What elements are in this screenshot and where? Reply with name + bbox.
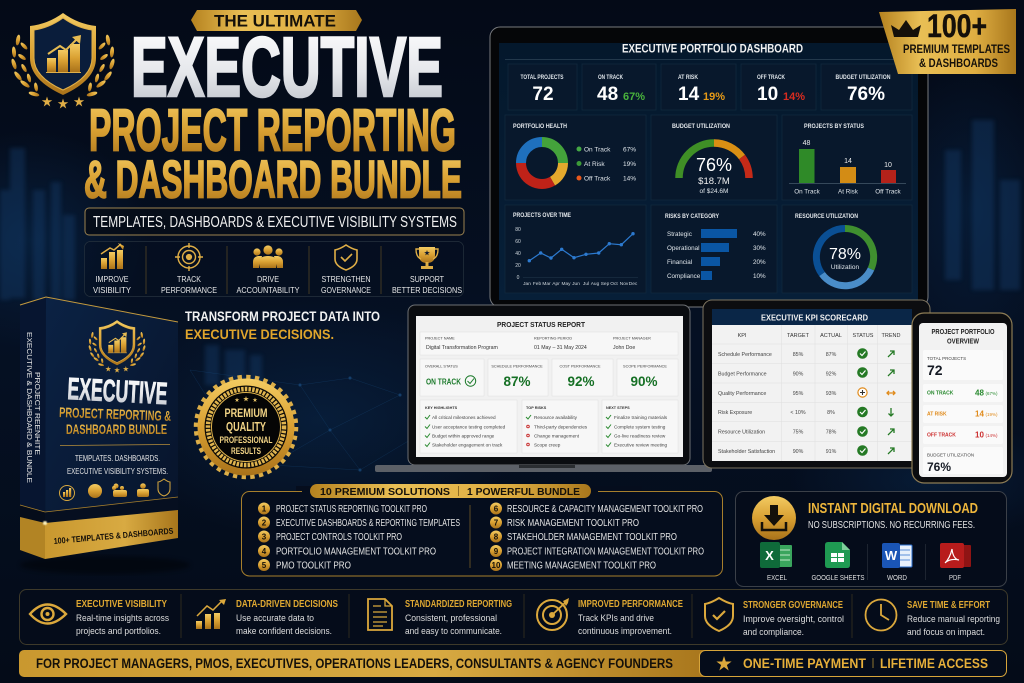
legend: On Track	[584, 146, 611, 154]
pill heading: 1 POWERFUL BUNDLE	[467, 486, 580, 498]
bar chart: 10	[884, 162, 892, 169]
highlights, risks and next steps: Resource availability	[534, 415, 578, 420]
line chart: 20	[515, 263, 521, 269]
spine text: PROJECT REENHITE	[33, 372, 40, 455]
highlights, risks and next steps	[420, 400, 678, 453]
on track: 48	[975, 388, 984, 398]
project info row: REPORTING PERIOD	[534, 336, 572, 340]
table rows: Stakeholder Satisfaction	[718, 449, 775, 455]
benefit: improved performance: Track KPIs and drive	[578, 613, 654, 623]
on track: ON TRACK	[927, 390, 954, 396]
panel: instant digital download: INSTANT DIGITAL DOWNLOAD	[808, 500, 978, 517]
label: improve visibility: VISIBILITY	[93, 285, 131, 295]
status cards: ON TRACK	[426, 378, 461, 386]
icon: pdf	[940, 543, 971, 568]
highlights, risks and next steps: Third-party dependencies	[534, 424, 588, 430]
monitor: executive portfolio dashboard	[490, 27, 928, 307]
off track	[927, 430, 998, 440]
at risk: AT RISK	[927, 412, 947, 418]
file type labels: EXCEL	[767, 573, 787, 582]
badge numbers: 6	[494, 504, 499, 514]
at risk: 14	[975, 410, 984, 418]
panel: instant digital download	[736, 492, 1006, 586]
line chart: Jun	[572, 281, 580, 287]
label: drive accountability: DRIVE	[257, 274, 279, 284]
budget utilization: BUDGET UTILIZATION	[927, 452, 974, 458]
table rows: 90%	[793, 449, 804, 455]
label: drive accountability: ACCOUNTABILITY	[236, 285, 300, 295]
off track: (14%)	[986, 433, 998, 438]
panel: projects over time	[505, 205, 646, 293]
benefit: standardized reporting: and easy to communicate.	[405, 626, 502, 636]
status cards: SCHEDULE PERFORMANCE	[491, 364, 543, 368]
project info row: John Doe	[613, 345, 635, 351]
panel: instant digital download: NO SUBSCRIPTIONS. NO RECURRING FEES.	[808, 520, 975, 531]
badge numbers	[262, 504, 501, 570]
legend: Off Track	[584, 176, 611, 182]
emblem: shield with laurel	[10, 13, 116, 108]
box title: EXECUTIVE	[67, 371, 168, 411]
KPI: total projects: 72	[532, 84, 554, 105]
icon: word	[882, 543, 912, 568]
benefit: save time and effort: Reduce manual reporting	[907, 614, 1000, 624]
status cards	[420, 359, 678, 396]
line chart: Jan	[523, 281, 531, 287]
horizontal bars: Strategic	[667, 231, 692, 238]
budget utilization: 76%	[927, 460, 951, 474]
panel: resource utilization: 78%	[829, 246, 861, 263]
on track	[927, 388, 998, 398]
icon: support better decisions	[416, 247, 438, 269]
line chart: 60	[515, 239, 521, 245]
line chart: Aug	[591, 281, 600, 287]
horizontal bars	[667, 229, 766, 280]
KPI: budget utilization: BUDGET UTILIZATION	[836, 75, 890, 81]
KPI: off track	[741, 64, 816, 110]
panel: risks by category: RISKS BY CATEGORY	[665, 213, 720, 220]
KPI: at risk: 14	[678, 84, 700, 105]
line chart: Apr	[552, 281, 560, 287]
line chart: 40	[515, 251, 521, 257]
solution list: RESOURCE & CAPACITY MANAGEMENT TOOLKIT PRO	[507, 504, 703, 515]
payment callout: ONE-TIME PAYMENT	[743, 656, 867, 671]
report title: PROJECT STATUS REPORT	[497, 320, 585, 329]
KPI: on track: 67%	[623, 91, 645, 103]
label: support better decisions: SUPPORT	[410, 274, 444, 284]
panel: resource utilization	[782, 205, 912, 293]
audience band	[19, 650, 709, 677]
legend: At Risk	[584, 161, 605, 168]
panel: budget utilization gauge	[651, 115, 777, 200]
phone title: PROJECT PORTFOLIO	[932, 329, 995, 336]
badge numbers: 2	[262, 518, 267, 528]
benefit: data-driven decisions	[196, 599, 338, 636]
seal text: PREMIUM	[224, 406, 268, 420]
badge numbers: 7	[494, 518, 499, 528]
table rows: 78%	[826, 430, 837, 436]
box gold band: 100+ TEMPLATES & DASHBOARDS	[53, 526, 174, 546]
badge: 100+ premium templates	[879, 8, 1016, 74]
KPI: total projects	[508, 64, 577, 110]
table rows: Budget Performance	[718, 372, 767, 378]
bar chart	[789, 140, 906, 196]
line chart: 80	[515, 227, 521, 233]
badge numbers: 9	[494, 547, 499, 556]
off track: OFF TRACK	[927, 432, 956, 438]
benefit: executive visibility: projects and portfolios.	[76, 626, 161, 636]
solution list: EXECUTIVE DASHBOARDS & REPORTING TEMPLATES	[276, 518, 460, 529]
bar chart: 48	[803, 140, 810, 147]
line chart: Jul	[583, 281, 589, 287]
badge numbers: 8	[494, 532, 499, 542]
panel: budget utilization gauge: 76%	[696, 155, 732, 175]
seal: premium quality	[196, 377, 296, 477]
icon: word: W	[885, 548, 898, 563]
status cards: COST PERFORMANCE	[559, 364, 601, 368]
payment callout	[700, 650, 1006, 676]
solution list: STAKEHOLDER MANAGEMENT TOOLKIT PRO	[507, 532, 677, 543]
highlights, risks and next steps: Stakeholder engagement on track	[432, 442, 503, 448]
table headers: KPI	[738, 333, 747, 339]
cards	[923, 350, 1003, 474]
label: support better decisions: BETTER DECISIONS	[392, 285, 462, 295]
number badges	[258, 502, 502, 571]
badge: 100+ premium templates: & DASHBOARDS	[919, 58, 998, 70]
panel: risks by category	[651, 205, 777, 293]
icon: track performance	[175, 243, 203, 271]
legend: 67%	[623, 146, 636, 154]
table headers: STATUS	[853, 333, 874, 339]
horizontal bars: Operational	[667, 245, 700, 252]
utilization ring	[816, 228, 874, 286]
KPI: on track: ON TRACK	[598, 75, 624, 81]
highlights, risks and next steps: Finalize training materials	[614, 415, 668, 420]
table rows	[718, 352, 837, 455]
benefit: save time and effort: SAVE TIME & EFFORT	[907, 600, 990, 611]
status cards: SCOPE PERFORMANCE	[623, 364, 667, 368]
KPI: at risk: 19%	[703, 91, 725, 103]
file type labels: WORD	[887, 573, 907, 582]
KPI: on track	[582, 64, 656, 110]
benefit: save time and effort: and focus on impact.	[907, 627, 985, 637]
badge: the ultimate	[191, 10, 362, 31]
line chart: Oct	[610, 281, 618, 287]
subtitle box	[85, 208, 464, 235]
box front	[45, 297, 178, 559]
box gold band	[20, 510, 178, 559]
budget utilization	[927, 452, 974, 474]
table rows: 95%	[793, 391, 804, 397]
bar chart: On Track	[794, 188, 821, 196]
solution list: PMO TOOLKIT PRO	[276, 560, 351, 572]
benefit: save time and effort	[866, 600, 1000, 637]
benefit: stronger governance: STRONGER GOVERNANCE	[743, 600, 843, 611]
trend arrows	[887, 351, 895, 454]
benefit: standardized reporting	[368, 599, 512, 636]
benefit: improved performance	[537, 598, 683, 636]
label: improve visibility: IMPROVE	[96, 274, 129, 284]
gauge arcs	[679, 143, 749, 178]
icon row: five benefits	[84, 242, 464, 296]
total projects: 72	[927, 362, 943, 378]
title: dashboard bundle: & DASHBOARD BUNDLE	[84, 150, 462, 210]
project info row	[420, 332, 678, 355]
panel: projects over time: PROJECTS OVER TIME	[513, 212, 572, 219]
label: strengthen governance: STRENGTHEN	[322, 274, 370, 284]
KPI: budget utilization: 76%	[847, 84, 885, 105]
status cards: 87%	[503, 374, 531, 389]
label: track performance: TRACK	[177, 274, 201, 284]
status icons	[857, 348, 868, 456]
panel: resource utilization: RESOURCE UTILIZATION	[795, 213, 858, 220]
solution list: PORTFOLIO MANAGEMENT TOOLKIT PRO	[276, 546, 436, 558]
highlights, risks and next steps: Executive review meeting	[614, 442, 668, 448]
benefit: standardized reporting: STANDARDIZED REPORTING	[405, 599, 512, 610]
KPI: off track: 10	[757, 84, 778, 105]
panel: budget utilization gauge: of $24.6M	[700, 188, 728, 195]
panel: budget utilization gauge: $18.7M	[698, 176, 730, 187]
line chart: May	[561, 281, 571, 287]
benefit: stronger governance: and compliance.	[743, 627, 804, 637]
seal text	[220, 406, 273, 457]
panel: ten premium solutions	[242, 484, 722, 576]
bar chart: Off Track	[875, 188, 902, 196]
file type labels: GOOGLE SHEETS	[812, 573, 864, 582]
icon: google sheets	[825, 542, 850, 568]
spine text	[25, 332, 40, 483]
KPI: at risk: AT RISK	[678, 75, 699, 81]
horizontal bars: 10%	[753, 273, 766, 280]
box tagline: TEMPLATES. DASHBOARDS.	[75, 454, 160, 463]
table rows: 85%	[793, 352, 804, 358]
project info row: PROJECT NAME	[425, 336, 455, 340]
table rows: Quality Performance	[718, 391, 766, 397]
KPI: off track: 14%	[783, 91, 805, 103]
line chart: 0	[517, 275, 520, 281]
line chart	[515, 227, 638, 287]
panel: resource utilization: Utilization	[831, 264, 859, 271]
phone title: OVERVIEW	[947, 338, 979, 346]
benefit: data-driven decisions: DATA-DRIVEN DECISIONS	[236, 599, 338, 610]
pill heading: 10 PREMIUM SOLUTIONS	[320, 486, 450, 498]
solution list: RISK MANAGEMENT TOOLKIT PRO	[507, 518, 639, 529]
highlights, risks and next steps: Change management	[534, 434, 580, 438]
benefit: stronger governance: Improve oversight, control	[743, 614, 844, 624]
table rows: 93%	[826, 391, 837, 397]
solution list: MEETING MANAGEMENT TOOLKIT PRO	[507, 560, 656, 572]
project info row: 01 May – 31 May 2024	[534, 345, 587, 351]
solution list: PROJECT CONTROLS TOOLKIT PRO	[276, 532, 402, 543]
payment callout: LIFETIME ACCESS	[880, 656, 988, 671]
bar chart: At Risk	[838, 188, 859, 196]
badge numbers: 10	[492, 561, 501, 570]
icon: excel	[760, 542, 792, 568]
box subtitle: PROJECT REPORTING &	[59, 404, 171, 424]
audience band: FOR PROJECT MANAGERS, PMOS, EXECUTIVES, OPERATIONS LEADERS, CONSULTANTS & AGENCY FOUNDERS	[36, 656, 673, 671]
label: track performance: PERFORMANCE	[161, 285, 217, 295]
benefit: data-driven decisions: Use accurate data to	[236, 613, 314, 623]
benefit: improved performance: IMPROVED PERFORMANCE	[578, 599, 683, 610]
benefit: stronger governance	[705, 598, 844, 637]
seal stars	[235, 396, 257, 402]
badge numbers: 3	[262, 532, 267, 542]
KPI: off track: OFF TRACK	[757, 75, 786, 81]
badge: the ultimate: THE ULTIMATE	[214, 12, 336, 30]
highlights, risks and next steps: Budget within approved range	[432, 434, 495, 438]
box tagline: EXECUTIVE VISIBILITY SYSTEMS.	[67, 467, 168, 476]
seal text: QUALITY	[226, 419, 266, 434]
horizontal bars: 20%	[753, 259, 766, 266]
box highlight	[43, 521, 47, 525]
horizontal bars: 30%	[753, 245, 766, 252]
icon: drive accountability	[253, 245, 283, 268]
box icons	[60, 479, 170, 500]
label: strengthen governance: GOVERNANCE	[321, 285, 371, 295]
title: project reporting: PROJECT REPORTING	[89, 98, 456, 164]
highlights, risks and next steps: Go-live readiness review	[614, 434, 666, 438]
bar chart: 14	[844, 158, 852, 165]
table rows: 90%	[793, 372, 804, 378]
tablet: executive KPI scorecard	[703, 300, 930, 468]
table rows: Resource Utilization	[718, 430, 765, 436]
KPI: total projects: TOTAL PROJECTS	[520, 75, 564, 81]
seal text: RESULTS	[231, 446, 261, 457]
tagline	[185, 309, 380, 342]
solution list: PROJECT INTEGRATION MANAGEMENT TOOLKIT PRO	[507, 546, 704, 558]
highlights, risks and next steps: User acceptance testing completed	[432, 424, 506, 430]
solution list	[276, 504, 704, 572]
line chart: Dec	[629, 281, 638, 287]
tagline: TRANSFORM PROJECT DATA INTO	[185, 309, 380, 324]
table rows: Schedule Performance	[718, 352, 772, 358]
box tagline	[67, 454, 168, 476]
highlights, risks and next steps: KEY HIGHLIGHTS	[425, 406, 458, 410]
highlights, risks and next steps: TOP RISKS	[526, 406, 547, 410]
scorecard title: EXECUTIVE KPI SCORECARD	[761, 312, 868, 322]
table rows: < 10%	[790, 410, 806, 416]
title: executive: EXECUTIVE	[131, 20, 443, 114]
horizontal bars: 40%	[753, 231, 766, 238]
table rows: 8%	[827, 410, 835, 416]
at risk: (19%)	[986, 412, 998, 417]
benefit: executive visibility	[30, 599, 169, 636]
KPI: on track: 48	[597, 84, 618, 105]
line chart: Feb	[533, 281, 541, 287]
horizontal bars: Financial	[667, 259, 692, 266]
KPI: budget utilization	[821, 64, 912, 110]
file type labels	[767, 573, 961, 582]
grid	[712, 325, 912, 461]
panel: portfolio health: PORTFOLIO HEALTH	[513, 123, 567, 130]
line chart: Mar	[542, 281, 551, 287]
table rows: 75%	[793, 430, 804, 436]
benefit: data-driven decisions: make confident decisions.	[236, 626, 332, 636]
horizontal bars: Compliance	[667, 273, 701, 280]
subtitle box: TEMPLATES, DASHBOARDS & EXECUTIVE VISIBILITY SYSTEMS	[93, 214, 457, 231]
phone: project portfolio overview	[912, 313, 1012, 483]
benefit: executive visibility: EXECUTIVE VISIBILITY	[76, 599, 167, 610]
total projects	[927, 356, 966, 378]
table headers: TARGET	[787, 333, 810, 339]
KPI: at risk	[661, 64, 736, 110]
icon: crown	[891, 20, 921, 37]
badge numbers: 4	[262, 547, 267, 556]
dashboard title: EXECUTIVE PORTFOLIO DASHBOARD	[622, 44, 803, 56]
table rows: 92%	[826, 372, 837, 378]
table headers: TREND	[882, 333, 900, 339]
highlights, risks and next steps: Complete system testing	[614, 424, 666, 430]
legend: 19%	[623, 161, 636, 168]
badge numbers: 5	[262, 561, 267, 570]
table headers	[738, 333, 900, 339]
seal text: PROFESSIONAL	[220, 435, 273, 446]
legend	[576, 146, 636, 182]
icon: strengthen governance	[335, 245, 357, 270]
laptop: project status report	[375, 305, 712, 472]
donut chart	[521, 142, 563, 184]
benefit: executive visibility: Real-time insights across	[76, 613, 169, 623]
icon: excel: X	[765, 548, 774, 563]
status cards: OVERALL STATUS	[425, 364, 458, 368]
table rows: Risk Exposure	[718, 410, 752, 416]
status cards: 92%	[567, 374, 595, 389]
highlights, risks and next steps: NEXT STEPS	[606, 406, 630, 410]
panel: budget utilization gauge: BUDGET UTILIZATION	[672, 123, 730, 130]
icon: improve visibility	[101, 243, 124, 269]
box dark band	[20, 497, 178, 523]
highlights, risks and next steps: Scope creep	[534, 442, 561, 448]
line chart: Nov	[620, 281, 629, 287]
file type labels: PDF	[949, 573, 961, 582]
project info row: PROJECT MANAGER	[613, 336, 651, 340]
spine text: EXECUTIVE & DASHBOARD & BUNDLE	[25, 332, 32, 483]
total projects: TOTAL PROJECTS	[927, 356, 966, 361]
panel: projects by status: PROJECTS BY STATUS	[804, 123, 865, 130]
legend: 14%	[623, 176, 636, 182]
benefit: standardized reporting: Consistent, professional	[405, 613, 497, 623]
at risk	[927, 410, 998, 418]
line chart: Sep	[601, 281, 610, 287]
icon: download	[752, 496, 796, 540]
on track: (67%)	[986, 391, 998, 396]
panel: projects by status	[782, 115, 912, 200]
table rows: 87%	[826, 352, 837, 358]
off track: 10	[975, 430, 984, 440]
status cards: 90%	[630, 374, 658, 389]
box emblem	[88, 320, 146, 373]
product box	[20, 297, 190, 574]
benefits strip	[20, 590, 1008, 644]
pill heading	[310, 484, 591, 498]
panel: portfolio health	[505, 115, 646, 200]
benefit: improved performance: continuous improvement.	[578, 626, 672, 636]
badge numbers: 1	[262, 504, 267, 514]
box spine	[20, 297, 46, 559]
box subtitle: DASHBOARD BUNDLE	[66, 421, 167, 437]
box subtitle	[59, 404, 171, 437]
tagline: EXECUTIVE DECISIONS.	[185, 327, 334, 342]
table rows: 91%	[826, 449, 837, 455]
highlights, risks and next steps: All critical milestones achieved	[432, 415, 496, 420]
badge: 100+ premium templates: 100+	[927, 8, 987, 44]
project info row: Digital Transformation Program	[426, 345, 498, 351]
table headers: ACTUAL	[820, 333, 842, 339]
solution list: PROJECT STATUS REPORTING TOOLKIT PRO	[276, 504, 427, 515]
